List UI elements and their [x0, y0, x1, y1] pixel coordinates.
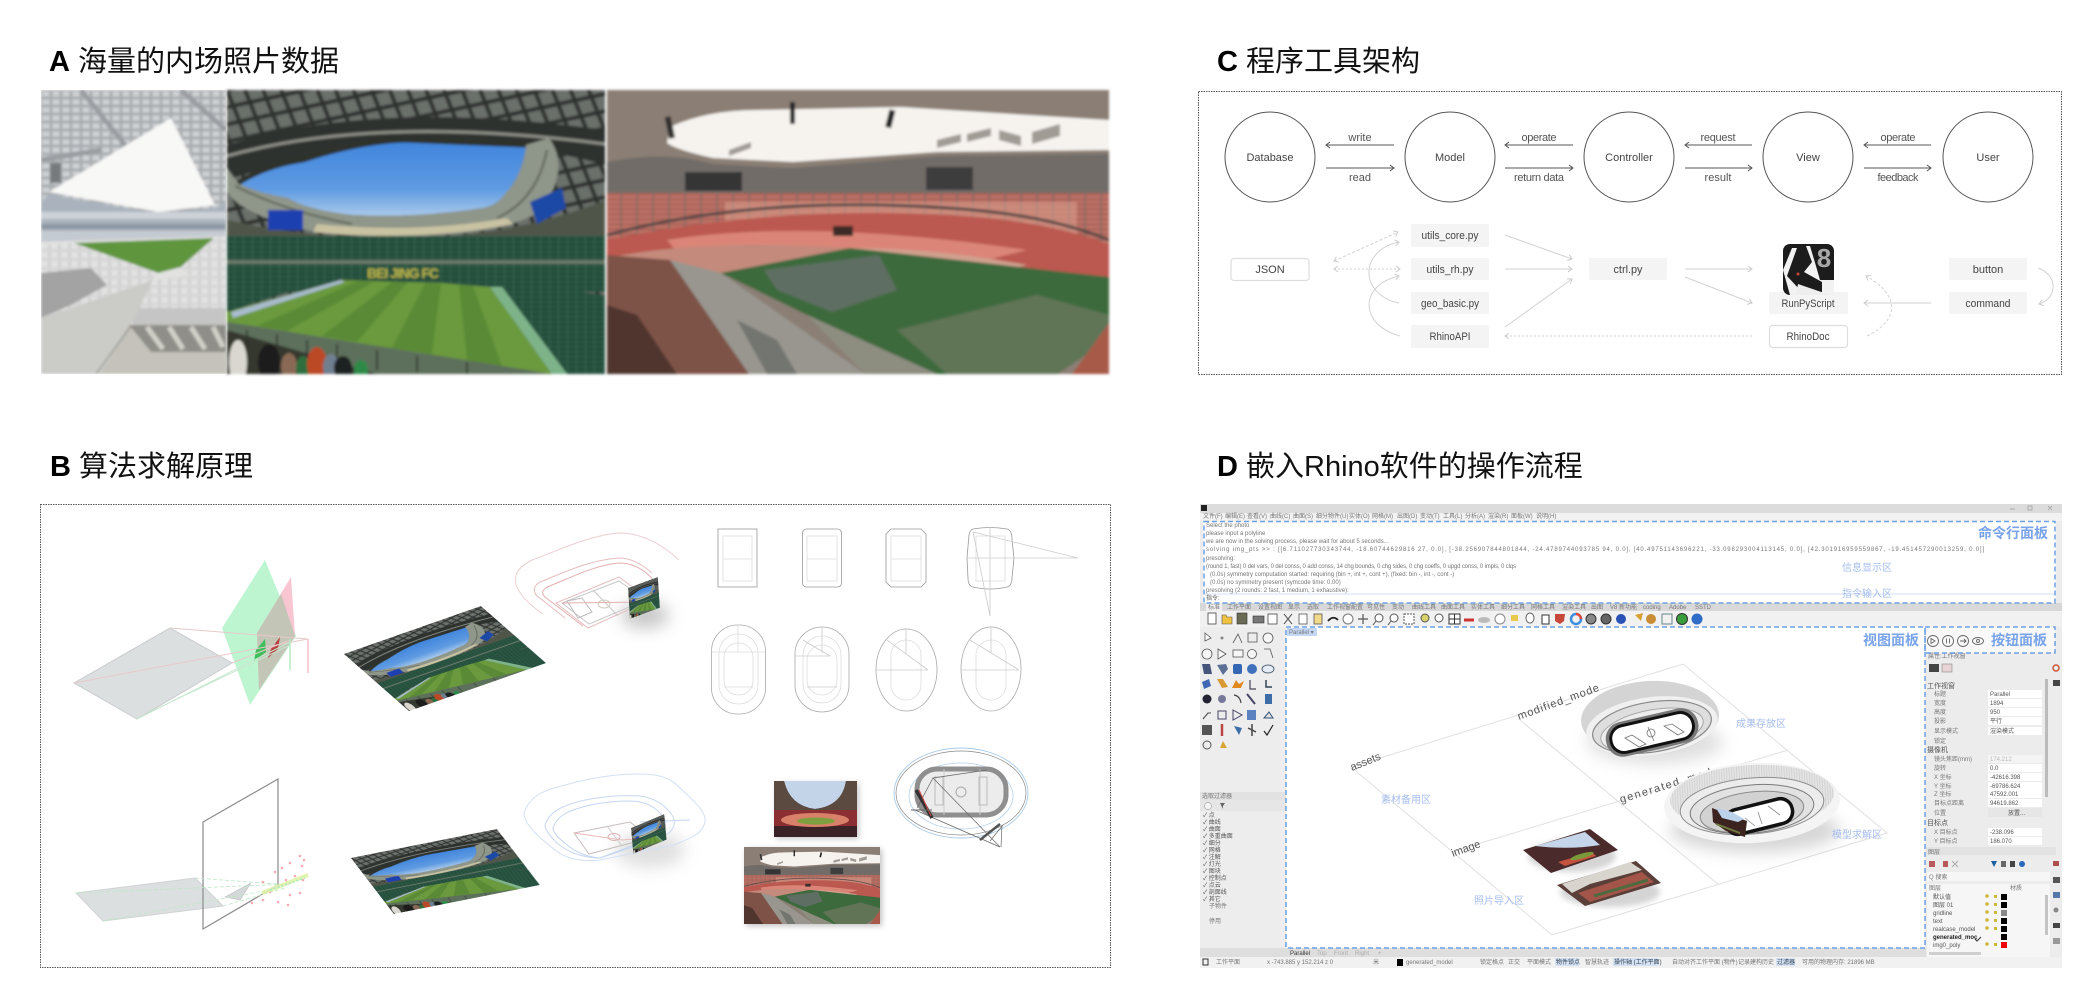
- stadium wireframe with cameras: [894, 748, 1028, 847]
- arrow labels: write: [1347, 132, 1372, 144]
- command zone labels: [1842, 561, 1892, 600]
- bottom tabs and status bar: Front: [1334, 951, 1348, 957]
- title C: C 程序工具架构: [1217, 45, 1420, 78]
- right properties panel: -69786.624: [1990, 784, 2021, 790]
- bottom tabs and status bar: 锁定格点: [1480, 958, 1504, 966]
- selection filter list: ✓ 曲面: [1203, 825, 1221, 833]
- selection filter list: 选取过滤器: [1202, 792, 1232, 800]
- selection filter list: ✓ 剖面线: [1203, 888, 1227, 896]
- right properties panel: X 坐标: [1934, 773, 1952, 781]
- arrow labels: feedback: [1878, 172, 1919, 184]
- zone labels: [1381, 717, 1882, 907]
- bottom tabs and status bar: 可用的物理内存: 21896 MB: [1802, 958, 1875, 966]
- arrow labels: operate: [1522, 132, 1556, 144]
- bottom tabs and status bar: 物件锁点: [1556, 958, 1580, 966]
- icon: Rhino 8: 8: [1817, 243, 1831, 273]
- bottom tabs and status bar: Top: [1317, 951, 1327, 957]
- nest photo large: [744, 847, 882, 926]
- red stadium contour sketch: [515, 533, 679, 629]
- toolbar tabs: 标准: [1208, 603, 1220, 611]
- panel name: buttons: 按钮面板: [1991, 632, 2047, 648]
- MVC circles: View: [1796, 152, 1820, 164]
- right properties panel: 投影: [1934, 717, 1946, 725]
- MVC circles: User: [1976, 152, 2000, 164]
- menu bar: 面板(W): [1511, 512, 1533, 520]
- stadium model: modified: [1579, 677, 1723, 764]
- right properties panel: 镜头焦距(mm): [1934, 755, 1972, 763]
- bottom tabs and status bar: Right: [1355, 951, 1369, 957]
- photo: white lattice stadium: [41, 90, 226, 374]
- arrow labels: result: [1705, 172, 1731, 184]
- toolbar tabs: V8 新功能: [1610, 603, 1637, 611]
- bottom tabs and status bar: 工作平面: [1216, 958, 1240, 966]
- menu bar: 编辑(E): [1225, 512, 1245, 520]
- toolbar tabs: 曲面工具: [1441, 603, 1465, 611]
- toolbar tabs: 工作视窗配置: [1327, 603, 1363, 611]
- viewport tab: [1287, 628, 1317, 636]
- selection filter list: ✓ 注解: [1203, 853, 1221, 861]
- python modules: RhinoAPI: [1430, 331, 1470, 343]
- toolbar tabs: Adobe: [1669, 605, 1687, 611]
- command history panel: (0.0s) symmetry computation started: requiring (bin +, int +, cont +), (fixed: bin -, int -, cont -): [1210, 572, 1454, 578]
- menu bar: [1200, 512, 2062, 521]
- imported photos on grid: [1523, 829, 1661, 907]
- zone titles on grid: generated_mod: [1618, 767, 1713, 806]
- title B: B 算法求解原理: [50, 450, 253, 483]
- toolbar tabs: coding: [1643, 605, 1661, 611]
- toolbar tabs: 可见性: [1367, 603, 1385, 611]
- right properties panel: X 目标点: [1934, 828, 1958, 836]
- small photo on red sketch: [628, 577, 660, 620]
- bottom tabs and status bar: 正交: [1508, 958, 1520, 966]
- icon: Rhino 8: [1783, 243, 1834, 295]
- title bar: [1200, 504, 2062, 513]
- menu bar: 查看(V): [1247, 512, 1267, 520]
- toolbar tabs: 显示: [1288, 604, 1300, 611]
- command history panel: 指令:: [1206, 594, 1220, 602]
- zone labels: 照片导入区: [1474, 894, 1524, 907]
- bottom tabs and status bar: [1200, 948, 2062, 968]
- selection filter list: ✓ 控制点: [1203, 874, 1227, 882]
- right properties panel: Q 搜索: [1929, 873, 1947, 881]
- python modules: utils_rh.py: [1426, 264, 1474, 276]
- command history panel: (round 1, fast) 0 del vars, 0 del conss, 0 add conss, 14 chg bounds, 0 chg sides, 0 chg coeffs, 0 upgd conss, 0 impls, 0 clqs: [1206, 564, 1516, 570]
- right properties panel: generated_moc: [1933, 935, 1978, 941]
- blue stadium contour sketch: [524, 774, 705, 868]
- arrow labels: operate: [1880, 132, 1916, 144]
- toolbar tabs: 设置视图: [1258, 603, 1282, 611]
- right properties panel: img0_poly: [1933, 943, 1960, 949]
- toolbar tabs: 选取: [1307, 603, 1319, 611]
- selection filter list: ✓ 其它: [1203, 895, 1221, 903]
- selection filter list: ✓ 曲线: [1203, 818, 1221, 826]
- arrow labels: [1347, 132, 1919, 184]
- right properties panel: 旋转: [1934, 764, 1946, 772]
- layout grid: [1351, 664, 1887, 935]
- MVC arrows: [1326, 145, 1931, 168]
- panel C frame: [1198, 92, 2062, 374]
- right properties panel: 0.0: [1990, 766, 1999, 772]
- command history panel: presolving:: [1206, 556, 1235, 562]
- right properties panel: realcase_model: [1933, 927, 1975, 933]
- bottom tabs and status bar: Parallel: [1290, 951, 1310, 957]
- skewed photo 1: [344, 606, 548, 713]
- button panel icons: [1928, 636, 1984, 646]
- arrow labels: read: [1349, 172, 1371, 184]
- panel name: view: 视图面板: [1863, 632, 1919, 648]
- right properties panel: Y 目标点: [1934, 837, 1958, 845]
- python modules: utils_core.py: [1422, 230, 1479, 242]
- right properties panel: 放置...: [2008, 809, 2025, 817]
- command history panel: we are now in the solving process, please wait for about 5 seconds...: [1205, 539, 1389, 545]
- title D: D 嵌入Rhino软件的操作流程: [1217, 450, 1583, 483]
- diagram: vanishing plane solve: [74, 560, 308, 719]
- node: button and command: button: [1973, 264, 2003, 276]
- left command toolbar: [1200, 627, 1286, 948]
- bottom tabs and status bar: 操作轴 (工作平面): [1614, 958, 1662, 966]
- command history panel: please input a polyline: [1206, 531, 1266, 537]
- zone titles on grid: assets: [1349, 751, 1383, 774]
- stadium model: generated: [1662, 758, 1842, 852]
- right properties panel: -42616.398: [1990, 775, 2021, 781]
- window background: [1200, 504, 2062, 968]
- command history panel: presolving (2 rounds: 2 fast, 1 medium, 1 exhaustive):: [1206, 588, 1349, 594]
- small photo on blue sketch: [631, 814, 667, 854]
- zone titles on grid: modified_mode: [1516, 682, 1601, 723]
- toolbar tabs: 细分工具: [1501, 603, 1525, 611]
- zone titles on grid: [1349, 682, 1713, 860]
- skewed photo 2: [351, 829, 541, 916]
- right properties panel: Parallel: [1990, 692, 2010, 698]
- toolbar tabs: 实体工具: [1471, 603, 1495, 611]
- arrow labels: request: [1700, 132, 1736, 144]
- photo: green stadium: BEI JING FC: [367, 265, 439, 281]
- toolbar tabs: 网格工具: [1531, 603, 1555, 611]
- file flow arrows: [1334, 232, 2053, 336]
- right properties panel: 950: [1990, 710, 2001, 716]
- bottom tabs and status bar: +: [1378, 951, 1382, 957]
- menu bar: 工具(L): [1443, 513, 1462, 520]
- selection filter list: ✓ 多重曲面: [1203, 832, 1233, 840]
- nest photo small: [774, 781, 859, 839]
- command history panel: [1203, 521, 2056, 603]
- ground plane with black frame: [76, 779, 308, 929]
- menu bar: 变动(T): [1420, 512, 1440, 520]
- zone labels: 成果存放区: [1736, 717, 1786, 730]
- panel name: command line: 命令行面板: [1978, 525, 2048, 541]
- selection filter list: ✓ 灯光: [1203, 860, 1221, 868]
- right properties panel: gridline: [1933, 911, 1953, 917]
- photo: red stadium: [607, 90, 1109, 374]
- menu bar: 分析(A): [1465, 512, 1485, 520]
- command zone labels: 信息显示区: [1842, 561, 1892, 574]
- bottom tabs and status bar: 平面模式: [1527, 958, 1551, 966]
- selection filter list: ✓ 网格: [1203, 846, 1221, 854]
- menu bar: 实体(O): [1349, 512, 1370, 520]
- viewport tab: Parallel ▾: [1289, 630, 1314, 636]
- menu bar: 说明(H): [1536, 512, 1556, 520]
- MVC circles: [1225, 112, 2033, 202]
- zone labels: 素材备用区: [1381, 793, 1431, 806]
- right properties panel: -238.096: [1990, 830, 2014, 836]
- title A: A 海量的内场照片数据: [49, 45, 339, 78]
- panel A: stadium photos: [41, 90, 1109, 384]
- rectangle fitting series: [718, 527, 1078, 616]
- right properties panel: 平行: [1990, 717, 2002, 725]
- zone titles on grid: image: [1450, 838, 1482, 860]
- MVC circles: Model: [1435, 152, 1465, 164]
- bottom tabs and status bar: generated_model: [1406, 960, 1453, 966]
- node: RhinoDoc: [1770, 326, 1848, 348]
- right properties panel: 图层: [1929, 885, 1941, 892]
- right properties panel: 摄像机: [1927, 745, 1948, 754]
- right properties panel: [1926, 627, 2062, 964]
- command zone labels: 指令输入区: [1842, 587, 1892, 600]
- toolbar tabs: 变动: [1392, 603, 1404, 611]
- panel B frame: [40, 504, 1110, 968]
- right properties panel: 高度: [1934, 708, 1946, 716]
- menu bar: 曲线(C): [1270, 512, 1290, 520]
- selection filter list: ✓ 点: [1203, 811, 1215, 819]
- right properties panel: 属性:工作视窗: [1928, 652, 1966, 660]
- menu bar: 曲面(S): [1293, 512, 1313, 520]
- python modules: [1411, 224, 1489, 348]
- node: button and command: command: [1966, 298, 2010, 310]
- node: JSON: [1231, 258, 1309, 280]
- right properties panel: 显示模式: [1934, 727, 1958, 735]
- selection filter list: 停用: [1209, 917, 1221, 925]
- selection filter list: [1200, 792, 1286, 925]
- toolbar tabs: [1200, 603, 2062, 611]
- bottom tabs and status bar: 智慧轨迹: [1585, 958, 1609, 966]
- right properties panel: 47592.001: [1990, 792, 2019, 798]
- command history panel: (0.0s) no symmetry present (symcode time: 0.00): [1210, 580, 1341, 586]
- right properties panel: 目标点: [1927, 818, 1948, 827]
- panel C: tool architecture: [1198, 92, 2062, 374]
- right properties panel: 图层 01: [1933, 902, 1954, 909]
- right properties panel: 渲染模式: [1990, 727, 2014, 735]
- node: JSON: JSON: [1255, 264, 1285, 276]
- right properties panel: 174.212: [1990, 757, 2012, 763]
- command history panel: Select the photo: [1206, 523, 1250, 529]
- menu bar: 细分物件(U): [1316, 512, 1348, 520]
- bottom tabs and status bar: 自动对齐工作平面 (物件): [1672, 958, 1738, 966]
- menu bar: 文件(F): [1203, 512, 1223, 520]
- selection filter list: ✓ 细分: [1203, 839, 1221, 847]
- bottom tabs and status bar: 过滤器: [1777, 958, 1795, 966]
- menu bar: 出图(D): [1397, 512, 1417, 520]
- selection filter list: ✓ 图块: [1203, 867, 1221, 875]
- selection filter list: 子物件: [1209, 902, 1227, 910]
- right properties panel: 186.070: [1990, 839, 2012, 845]
- MVC circles: Controller: [1605, 152, 1653, 164]
- toolbar tabs: 曲线工具: [1412, 603, 1436, 611]
- right properties panel: Y 坐标: [1934, 782, 1952, 790]
- toolbar tabs: SSTD: [1695, 605, 1712, 611]
- right properties panel: 宽度: [1934, 699, 1946, 707]
- command history panel: solving img_pts >> : [[6.711027730343744, -18.60744629816 27, 0.0], [-38.256907844801844, -24.4789744093785 94, 0.0], [40.49751143696221, -33.098293004113145, 0.0], [42.301916959559867, -19.451457290013259, 0.0]]: [1206, 547, 1984, 553]
- right properties panel: 图层: [1928, 849, 1940, 856]
- right properties panel: 标题: [1934, 690, 1946, 698]
- right properties panel: 94619.862: [1990, 801, 2019, 807]
- right properties panel: 1894: [1990, 701, 2004, 707]
- dashed panel outlines: [1204, 522, 2055, 948]
- right properties panel: text: [1933, 919, 1943, 925]
- right properties panel: 锁定: [1934, 737, 1946, 745]
- panel D: Rhino interface: [1200, 504, 2062, 968]
- viewport: [1286, 627, 1925, 948]
- zone labels: 模型求解区: [1832, 828, 1882, 841]
- right properties panel: 默认值: [1933, 893, 1951, 901]
- node: RhinoDoc: RhinoDoc: [1786, 331, 1830, 343]
- right properties panel: Z 坐标: [1934, 790, 1951, 798]
- right properties panel: 材质: [2010, 884, 2022, 892]
- menu bar: 网格(M): [1372, 512, 1393, 520]
- MVC circles: Database: [1246, 152, 1294, 164]
- photo: green stadium: [227, 90, 605, 384]
- bottom tabs and status bar: x -743.885 y 152.214 z 0: [1267, 960, 1334, 966]
- toolbar tabs: 渲染工具: [1562, 603, 1586, 611]
- menu bar: 渲染(R): [1488, 512, 1508, 520]
- side strip icons: [2053, 665, 2060, 964]
- node: RunPyScript: [1769, 292, 1848, 314]
- bottom tabs and status bar: 米: [1373, 958, 1379, 966]
- node: RunPyScript: RunPyScript: [1782, 298, 1834, 310]
- main toolbar icons: [1200, 611, 2062, 627]
- toolbar tabs: 出图: [1591, 603, 1603, 611]
- toolbar tabs: 工作平面: [1227, 603, 1251, 611]
- right properties panel: 位置: [1934, 809, 1946, 817]
- python modules: geo_basic.py: [1421, 298, 1479, 310]
- arrow labels: return data: [1514, 172, 1565, 184]
- right properties panel: 工作视窗: [1927, 681, 1955, 690]
- oval fitting series: [712, 625, 1021, 714]
- selection filter list: ✓ 点云: [1203, 881, 1221, 889]
- bottom tabs and status bar: 记录建构历史: [1738, 958, 1774, 966]
- right properties panel: 目标点距离: [1934, 799, 1964, 807]
- node: ctrl.py: [1589, 258, 1667, 280]
- node: button and command: [1949, 258, 2027, 314]
- panel B: algorithm principle: [40, 504, 1110, 968]
- node: ctrl.py: ctrl.py: [1614, 264, 1643, 276]
